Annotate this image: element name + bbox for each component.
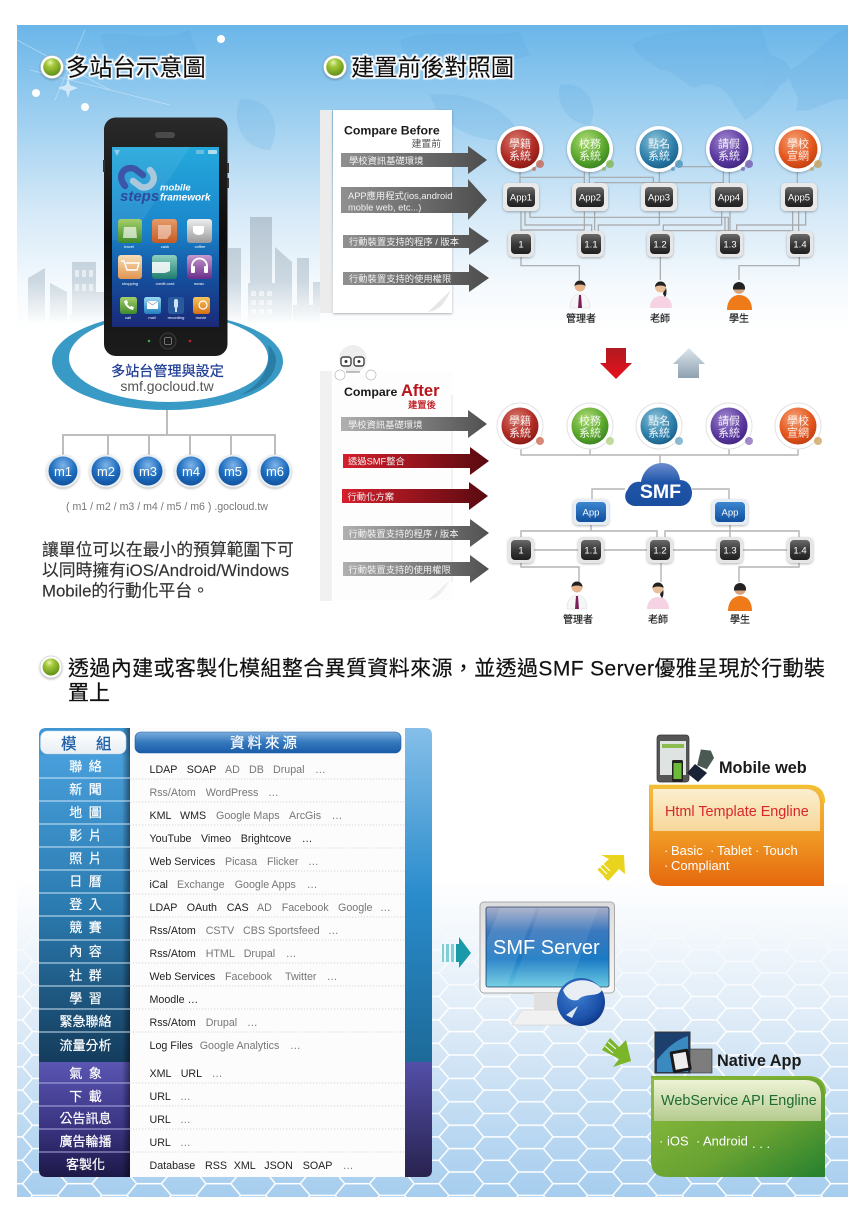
app icon grid: call	[125, 315, 131, 320]
list: data source rows: Log Files	[150, 1040, 193, 1052]
arrow: mobile solution	[342, 482, 488, 510]
system buttons: after	[497, 403, 822, 449]
ellipse: multi-site management platform: 多站台管理與設定	[111, 363, 224, 379]
column: modules: 日 曆	[69, 874, 102, 889]
arrow: supported versions	[343, 227, 489, 255]
panel: compare before	[320, 110, 489, 313]
list: data source rows: Facebook	[225, 971, 273, 983]
panel: html template engine: Basic	[671, 843, 703, 858]
list: data source rows: …	[332, 810, 342, 822]
app buttons: before: App5	[788, 192, 810, 204]
list: data source rows: …	[180, 1137, 191, 1149]
sub-site buttons m1-m6: m1	[54, 464, 72, 479]
heading: compare after	[344, 382, 440, 410]
arrow: school infrastructure	[341, 410, 487, 438]
list: data source rows: XML	[150, 1068, 172, 1080]
system buttons: before: 請假	[718, 136, 740, 150]
arrow: SMF integration	[343, 447, 489, 475]
list: data source rows: …	[343, 1160, 353, 1172]
decoration: city buildings	[28, 217, 320, 325]
users: after	[563, 582, 752, 626]
app buttons: before: App2	[579, 192, 601, 204]
sub-site buttons m1-m6: m3	[139, 464, 157, 479]
text block: platform description: 讓單位可以在最小的預算範圍下可	[42, 540, 294, 560]
app icon grid: travel	[124, 244, 134, 249]
users: after: 管理者	[563, 613, 593, 626]
heading: compare before: 建置前	[412, 137, 441, 150]
app buttons: before: App1	[510, 192, 532, 204]
sub-site buttons m1-m6	[46, 454, 292, 488]
list: data source rows: …	[180, 1114, 191, 1126]
list: data source rows: …	[307, 879, 317, 891]
column: modules: 氣 象	[69, 1066, 102, 1081]
list: data source rows: Flicker	[267, 856, 299, 868]
users: after: 學生	[730, 613, 750, 626]
arrow: usage permissions: 行動裝置支持的使用權限	[349, 273, 451, 284]
heading: multi-site diagram: 多站台示意圖	[66, 54, 206, 80]
list: data source rows: …	[315, 764, 326, 776]
icon: SMF Server monitor	[480, 902, 614, 1026]
version buttons: after: 1.3	[723, 546, 737, 556]
system buttons: after: 系統	[718, 426, 740, 440]
list: data source rows: Google Apps	[235, 879, 296, 891]
version buttons: before: 1.3	[723, 240, 737, 250]
arrow: red down	[600, 348, 632, 379]
system buttons: before: 學籍	[509, 136, 531, 150]
icon: SMF cloud: SMF	[640, 481, 681, 503]
list: data source rows: WMS	[180, 810, 206, 822]
list: data source rows: Rss/Atom	[150, 787, 196, 799]
icon: administrator	[570, 280, 590, 308]
list: data source rows: HTML	[206, 948, 235, 960]
arrow: mobile solution: 行動化方案	[348, 491, 394, 502]
version buttons: after: 1.4	[793, 546, 807, 556]
list: data source rows	[150, 764, 391, 1172]
list: data source rows: RSS	[205, 1160, 227, 1172]
list: data source rows: …	[212, 1068, 222, 1080]
version buttons: before: 1	[518, 240, 524, 250]
arrow: usage permissions: 行動裝置支持的使用權限	[348, 564, 451, 575]
panel: html template engine: ·	[755, 843, 759, 858]
panel: webservice API engine: Android	[703, 1134, 748, 1148]
column: modules: 緊急聯絡	[59, 1014, 112, 1029]
system buttons: before: 校務	[579, 136, 601, 150]
app icon grid: shopping	[122, 281, 138, 286]
panel: html template engine: Tablet	[717, 843, 752, 858]
icon: smartphone	[103, 118, 229, 356]
list: data source rows: Exchange	[177, 879, 225, 891]
text block: platform description	[42, 540, 294, 600]
panel: html template engine: Compliant	[671, 858, 730, 873]
system buttons: after: 學校	[787, 414, 809, 428]
list: data source rows: …	[327, 971, 337, 983]
column: modules: 內 容	[69, 944, 102, 959]
panel: webservice API engine: iOS	[667, 1134, 689, 1148]
panel: webservice API engine: . . .	[752, 1136, 770, 1151]
connector: platform to sub-sites	[63, 410, 275, 457]
users: before: 老師	[650, 312, 670, 325]
list: data source rows: YouTube	[150, 833, 192, 845]
heading: mobile web with device icons: Mobile web	[719, 759, 807, 777]
version buttons: after: 1.1	[584, 546, 598, 556]
column: modules: 登 入	[69, 897, 102, 912]
app buttons: before: App4	[718, 192, 740, 204]
list: data source rows: CBS Sportsfeed	[243, 925, 320, 937]
arrow: usage permissions	[343, 264, 489, 292]
app buttons: before	[503, 183, 817, 211]
system buttons: before: 點名	[648, 136, 670, 150]
list: data source rows: AD	[257, 902, 272, 914]
icon: tablet and phone	[655, 1032, 712, 1073]
sub-site buttons m1-m6: m5	[224, 464, 242, 479]
icon: teacher	[647, 582, 669, 609]
steps logo	[120, 168, 211, 205]
heading: data source integration	[40, 656, 825, 705]
arrow: supported versions: 行動裝置支持的程序 / 版本	[348, 528, 459, 539]
icon: student	[727, 282, 752, 310]
panel: webservice API engine: ·	[696, 1134, 700, 1148]
arrow: app programs: moble web, etc...)	[348, 202, 421, 212]
list: data source rows: Web Services	[150, 856, 215, 868]
arrow: yellow to mobile web	[597, 855, 625, 881]
list: data source rows: …	[380, 902, 391, 914]
text block: platform description: Mobile的行動化平台。	[42, 582, 209, 600]
diagram: before connections	[520, 167, 806, 280]
version buttons: before: 1.1	[584, 240, 598, 250]
list: data source rows: Google Analytics	[200, 1040, 279, 1052]
list: data source rows: Web Services	[150, 971, 215, 983]
users: before	[566, 280, 752, 325]
list: data source rows: Picasa	[225, 856, 257, 868]
app icon grid: mail	[148, 315, 156, 320]
caption: sub-site domains: ( m1 / m2 / m3 / m4 / m5 / m6 ) .gocloud.tw	[66, 501, 268, 513]
column: modules: 競 賽	[69, 920, 102, 935]
heading: data source integration: 置上	[68, 682, 110, 705]
arrow: app programs	[341, 179, 487, 220]
list: data source rows: LDAP	[150, 764, 177, 776]
system buttons: before: 系統	[579, 148, 601, 162]
list: data source rows: Brightcove	[241, 833, 291, 845]
sub-site buttons m1-m6: m6	[266, 464, 284, 479]
panel: html template engine: ·	[710, 843, 714, 858]
list: data source rows: JSON	[264, 1160, 293, 1172]
panel: sky background	[17, 25, 848, 330]
list: data source rows: Drupal	[273, 764, 304, 776]
header: modules: 模組	[61, 735, 112, 753]
system buttons: before: 宣網	[787, 148, 809, 162]
column: modules: 學 習	[69, 991, 102, 1006]
list: data source rows: Database	[150, 1160, 195, 1172]
ellipse: multi-site management platform: smf.gocloud.tw	[120, 378, 215, 394]
steps logo: steps	[120, 188, 159, 205]
panel: html template engine: ·	[664, 858, 668, 873]
system buttons: after: 學籍	[509, 414, 531, 428]
icon: SMF cloud	[625, 463, 692, 506]
list: data source rows: Facebook	[282, 902, 329, 914]
sub-site buttons m1-m6: m2	[97, 464, 115, 479]
app icon grid: movie	[196, 315, 207, 320]
sub-site buttons m1-m6: m4	[182, 464, 200, 479]
column: right accent	[405, 728, 432, 1177]
list: data source rows: …	[302, 833, 312, 845]
list: data source rows: Vimeo	[201, 833, 231, 845]
list: data source rows: …	[328, 925, 339, 937]
system buttons: before: 系統	[718, 148, 740, 162]
list: data source rows: URL	[150, 1114, 171, 1126]
version buttons: after: 1	[518, 546, 524, 556]
system buttons: after: 點名	[648, 414, 670, 428]
icon: globe	[557, 978, 605, 1026]
users: after: 老師	[648, 613, 668, 626]
arrow: teal into server	[442, 937, 471, 968]
list: data source rows: CAS	[227, 902, 249, 914]
column: modules: 流量分析	[59, 1038, 112, 1053]
arrow: school infrastructure	[341, 146, 487, 174]
list: data source rows: URL	[150, 1137, 171, 1149]
panel: webservice API engine: WebService API Engline	[661, 1093, 817, 1109]
column: modules: 社 群	[69, 968, 102, 983]
heading: before/after comparison: 建置前後對照圖	[351, 54, 514, 80]
system buttons: after: 系統	[509, 426, 531, 440]
diagram: after connections	[521, 445, 800, 582]
system buttons: before: 系統	[509, 148, 531, 162]
system buttons: before: 學校	[787, 136, 809, 150]
system buttons: before	[497, 126, 822, 172]
icon: administrator	[567, 582, 587, 609]
list: data source rows: Rss/Atom	[150, 1017, 196, 1029]
header: modules	[40, 731, 126, 754]
column: modules: 照 片	[69, 851, 102, 866]
system buttons: before: 系統	[648, 148, 670, 162]
arrow: supported versions	[343, 519, 489, 547]
list: data source rows: iCal	[150, 879, 168, 891]
list: data source rows: …	[290, 1040, 301, 1052]
list: data source rows: …	[247, 1017, 258, 1029]
list: data source rows: CSTV	[206, 925, 235, 937]
arrow: gray up	[673, 348, 705, 378]
panel: bottom hexagon background	[17, 915, 848, 1197]
app buttons: after	[573, 499, 748, 525]
column: modules: 新 聞	[69, 782, 102, 797]
column: modules: 下 載	[69, 1089, 102, 1104]
system buttons: after: 系統	[579, 426, 601, 440]
list: data source rows: SOAP	[303, 1160, 332, 1172]
list: data source rows: Twitter	[285, 971, 317, 983]
list: data source rows: WordPress	[206, 787, 258, 799]
version buttons: after	[508, 537, 813, 563]
heading: native app with device icons	[655, 1032, 801, 1073]
panel: compare after	[320, 345, 489, 601]
panel: webservice API engine	[651, 1077, 825, 1177]
heading: compare after: Compare	[344, 385, 397, 399]
list: data source rows: …	[308, 856, 319, 868]
arrow: supported versions: 行動裝置支持的程序 / 版本	[349, 236, 459, 247]
list: data source rows: …	[180, 1091, 191, 1103]
system buttons: after: 校務	[579, 414, 601, 428]
app icon grid: recording	[168, 315, 184, 320]
list: data source rows: URL	[150, 1091, 171, 1103]
panel: html template engine: Html Template Engline	[665, 804, 809, 820]
version buttons: after: 1.2	[653, 546, 667, 556]
app icon grid: music	[194, 281, 204, 286]
column: modules: 公告訊息	[59, 1111, 112, 1126]
icon: mobile devices	[657, 735, 715, 782]
column: modules	[39, 728, 130, 1177]
column: modules: 客製化	[66, 1157, 105, 1172]
users: before: 管理者	[566, 312, 596, 325]
column: modules: 影 片	[69, 828, 102, 843]
list: data source rows: Moodle …	[150, 994, 198, 1006]
column: modules: 聯 絡	[69, 759, 102, 774]
version buttons: before: 1.2	[653, 240, 667, 250]
list: data source rows: SOAP	[187, 764, 216, 776]
text block: platform description: 以同時擁有iOS/Android/Windows	[42, 561, 289, 580]
heading: data source integration: 透過內建或客製化模組整合異質資料來源，並透過SMF Server優雅呈現於行動裝	[68, 658, 825, 680]
app icon grid: coffee	[195, 244, 206, 249]
arrow: app programs: APP應用程式(ios,android	[348, 190, 452, 201]
list: data source rows: OAuth	[187, 902, 217, 914]
list: data source rows: LDAP	[150, 902, 177, 914]
app buttons: before: App3	[648, 192, 670, 204]
column: modules: 地 圖	[69, 805, 102, 820]
list: data source rows: XML	[234, 1160, 256, 1172]
list: data source rows: Drupal	[244, 948, 275, 960]
heading: native app with device icons: Native App	[717, 1052, 801, 1070]
app buttons: after: App	[583, 508, 599, 518]
icon: robot mascot	[335, 345, 376, 380]
header: data sources: 資料來源	[230, 735, 300, 752]
list: data source rows: Rss/Atom	[150, 925, 196, 937]
arrow: green to native app	[602, 1038, 631, 1067]
app buttons: after: App	[722, 508, 738, 518]
app icon grid: credit card	[156, 281, 174, 286]
list: data source rows: Rss/Atom	[150, 948, 196, 960]
panel: html template engine	[649, 786, 824, 886]
app icon grid: cash	[161, 244, 169, 249]
list: data source rows: Google Maps	[216, 810, 280, 822]
system buttons: after: 請假	[718, 414, 740, 428]
panel: html template engine: ·	[664, 843, 668, 858]
list: data source rows: AD	[225, 764, 240, 776]
phone screen	[112, 147, 219, 327]
heading: compare before: Compare Before	[344, 124, 440, 138]
steps logo: mobile	[160, 182, 191, 194]
list: data source rows: …	[286, 948, 296, 960]
version buttons: before	[508, 231, 813, 257]
panel: modules and data sources table	[39, 728, 432, 1177]
column: modules: 廣告輪播	[59, 1134, 112, 1149]
users: before: 學生	[729, 312, 749, 325]
arrow: usage permissions	[343, 555, 489, 583]
list: data source rows: KML	[150, 810, 172, 822]
list: data source rows: DB	[249, 764, 264, 776]
header: data sources	[135, 732, 401, 753]
icon: student	[728, 583, 752, 611]
panel: html template engine: Touch	[763, 843, 798, 858]
system buttons: after: 宣網	[787, 426, 809, 440]
steps logo: framework	[160, 192, 211, 204]
icon: SMF Server monitor: SMF Server	[493, 937, 600, 959]
list: data source rows: Drupal	[206, 1017, 237, 1029]
arrow: SMF integration: 透過SMF整合	[348, 456, 405, 466]
list: data source rows: …	[268, 787, 279, 799]
system buttons: after: 系統	[648, 426, 670, 440]
version buttons: before: 1.4	[793, 240, 807, 250]
app icon grid	[118, 219, 212, 320]
ellipse: multi-site management platform	[52, 313, 283, 410]
list: data source rows: URL	[181, 1068, 202, 1080]
heading: mobile web with device icons	[657, 735, 807, 782]
list: data source rows: Google	[338, 902, 373, 914]
list: data source rows: ArcGis	[289, 810, 321, 822]
panel: webservice API engine: ·	[659, 1134, 663, 1148]
icon: teacher	[650, 282, 672, 308]
heading: compare after: After	[401, 382, 440, 400]
heading: compare before	[344, 124, 441, 150]
arrow: school infrastructure: 學校資訊基礎環境	[348, 419, 422, 430]
arrow: school infrastructure: 學校資訊基礎環境	[349, 155, 423, 166]
heading: compare after: 建置後	[408, 399, 436, 410]
